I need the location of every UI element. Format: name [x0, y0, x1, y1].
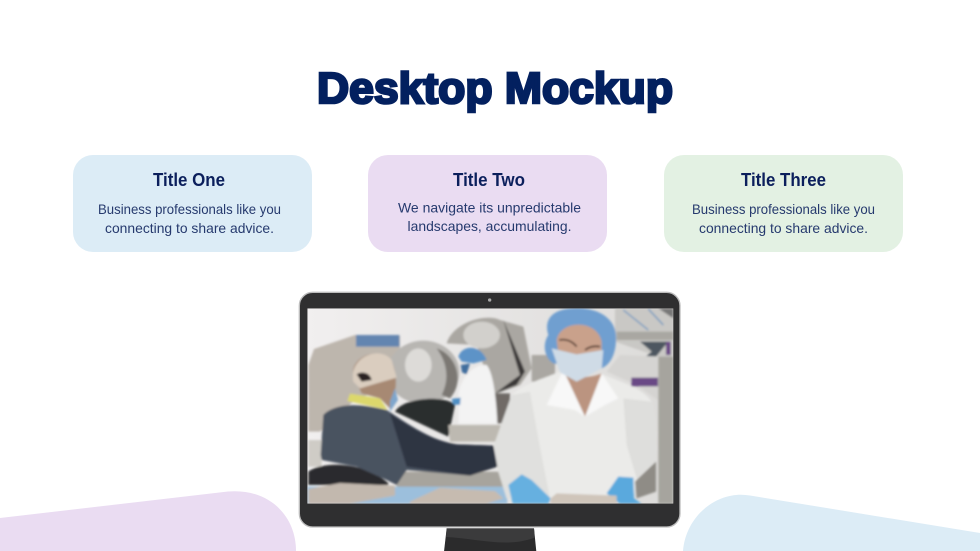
text block: title one description — [98, 202, 281, 236]
decorative blob: purple bottom left — [0, 491, 296, 551]
text block: title three description: Business professionals like you — [692, 202, 875, 217]
rear chair and table — [395, 399, 455, 437]
main worker coat — [525, 372, 650, 498]
right machine tray — [635, 462, 656, 498]
table and trays — [307, 487, 507, 504]
main worker face — [555, 323, 603, 356]
tray under hands — [551, 493, 617, 504]
text block: title one description: connecting to share advice. — [105, 221, 274, 236]
text block: title one description: Business professionals like you — [98, 202, 281, 217]
left machine — [308, 335, 400, 432]
machinery right — [615, 308, 673, 362]
heading: title three: Title Three — [741, 170, 826, 190]
main worker mask — [552, 348, 603, 382]
text block: title three description — [692, 202, 875, 236]
webcam dot — [488, 298, 491, 302]
decorative blob: blue bottom right — [683, 495, 980, 551]
text block: title two description: We navigate its unpredictable — [398, 200, 581, 216]
text block: title three description: connecting to share advice. — [699, 221, 868, 236]
bench foreground — [396, 470, 504, 488]
main worker hairnet — [545, 308, 616, 368]
monitor stand — [444, 528, 536, 551]
desktop monitor mockup — [299, 292, 680, 551]
near chair — [308, 465, 388, 485]
main worker gloves — [508, 474, 551, 504]
rear drum — [447, 318, 532, 395]
seated worker body — [321, 405, 497, 485]
text block: title two description — [398, 200, 581, 234]
rear worker — [458, 365, 497, 424]
panel: title three — [664, 155, 903, 252]
heading: title two: Title Two — [453, 170, 525, 190]
panel: title two — [368, 155, 607, 252]
title: Desktop Mockup — [317, 64, 673, 113]
seated worker head — [353, 354, 396, 408]
front drum — [387, 341, 459, 404]
monitor frame — [299, 292, 680, 527]
heading: title one: Title One — [153, 170, 225, 190]
panel: title one — [73, 155, 312, 252]
text block: title two description: landscapes, accumulating. — [408, 219, 572, 234]
photo on screen: lab workers — [307, 308, 673, 504]
